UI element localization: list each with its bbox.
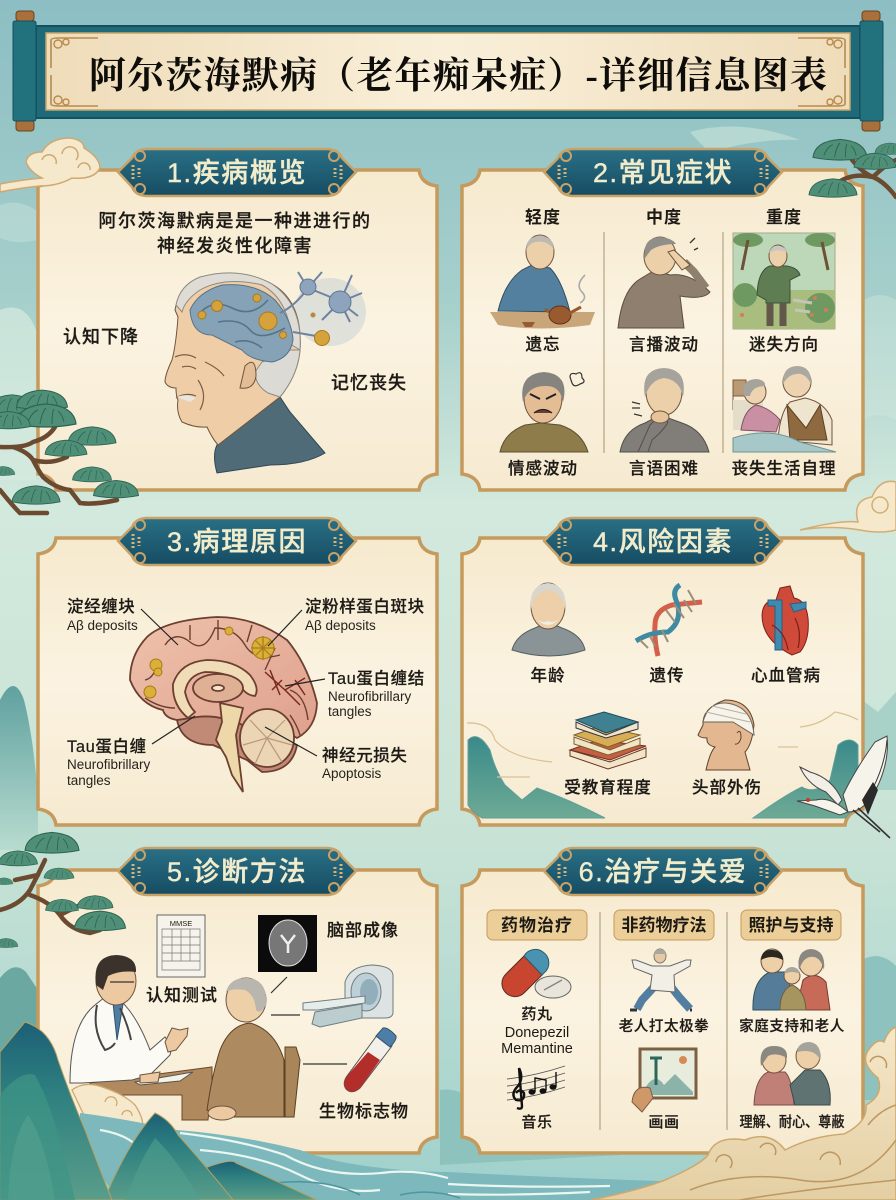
symptom: language fluctuation — [618, 237, 710, 354]
risk: genetics — [636, 585, 702, 685]
label: neuron loss — [322, 746, 408, 781]
banner — [544, 149, 782, 196]
panel 1: overview — [38, 149, 437, 490]
banner: 2.常见症状 — [593, 158, 733, 188]
risk: cardiovascular: 心血管病 — [751, 666, 821, 685]
label: plaque — [67, 596, 138, 633]
banner: 5.诊断方法 — [167, 857, 307, 887]
tai chi figure — [630, 949, 692, 1010]
column: non-drug therapy: 老人打太极拳 — [619, 1018, 709, 1035]
column: non-drug therapy: 非药物疗法 — [622, 915, 706, 935]
column: non-drug therapy — [614, 910, 714, 1131]
risk: head injury — [692, 700, 762, 797]
banner — [118, 149, 356, 196]
risk: education: 受教育程度 — [564, 778, 652, 797]
severity headers — [525, 208, 802, 227]
label: cognitive decline: 认知下降 — [63, 327, 139, 347]
banner: 3.病理原因 — [167, 527, 307, 557]
decoration: river — [80, 1113, 690, 1200]
panel 6: treatment — [462, 848, 863, 1153]
blood tube — [344, 1028, 396, 1092]
severity headers: 重度 — [766, 208, 802, 227]
symptom: forgetfulness — [490, 235, 595, 354]
column: medication: 药物治疗 — [501, 915, 573, 935]
symptom: language fluctuation: 言播波动 — [629, 335, 699, 354]
banner: 1.疾病概览 — [167, 158, 307, 188]
symptom: mood swings — [500, 372, 588, 478]
decoration: cloud right middle — [800, 481, 896, 532]
elderly man with brain — [165, 272, 366, 473]
pointer lines — [141, 609, 325, 756]
symptom: disorientation — [733, 233, 835, 354]
label: tau tangle: tangles — [328, 704, 372, 719]
column: medication: 药丸 — [521, 1006, 553, 1023]
risk: head injury: 头部外伤 — [692, 778, 762, 797]
label: amyloid plaque: Aβ deposits — [305, 618, 376, 633]
label: tau: Tau蛋白缠 — [67, 736, 147, 756]
label: cognitive test: 认知测试 — [146, 986, 218, 1005]
severity headers: 中度 — [646, 208, 682, 227]
decoration: clouds bottom right — [591, 1027, 896, 1200]
left roller — [13, 11, 36, 131]
painting — [632, 1049, 696, 1112]
mmse form: MMSE — [170, 919, 192, 928]
column: medication: Donepezil — [505, 1025, 569, 1041]
decoration: cloud top left — [0, 138, 100, 192]
panel 3: pathology — [38, 518, 437, 825]
label: tau tangle — [328, 668, 425, 719]
label: neuron loss: 神经元损失 — [322, 746, 408, 765]
patient — [207, 978, 300, 1120]
label: patience and respect: 理解、耐心、尊蔽 — [740, 1114, 845, 1131]
symptom: mood swings: 情感波动 — [508, 459, 578, 478]
decoration: pine tree left lower — [0, 832, 126, 948]
background mist — [0, 127, 896, 480]
intro text — [98, 211, 372, 256]
label: plaque: Aβ deposits — [67, 618, 138, 633]
severity headers: 轻度 — [525, 208, 561, 227]
risk: age: 年龄 — [530, 666, 566, 685]
landscape in panel — [467, 712, 858, 818]
banner — [544, 518, 782, 565]
symptom: disorientation: 迷失方向 — [749, 334, 819, 354]
right roller — [860, 11, 883, 131]
table — [90, 1067, 212, 1120]
risk: cardiovascular — [751, 586, 821, 685]
music notes — [507, 1066, 565, 1109]
symptom: forgetfulness: 遗忘 — [526, 334, 560, 354]
label: brain imaging: 脑部成像 — [327, 921, 399, 940]
symptom: loss of self-care — [732, 366, 836, 478]
decoration: pine tree top right — [809, 139, 896, 197]
symptom: loss of self-care: 丧失生活自理 — [732, 459, 836, 478]
mri scan — [258, 915, 317, 972]
background distant hill — [440, 1090, 620, 1165]
label: tau tangle: Tau蛋白缠结 — [328, 668, 425, 688]
intro text: 神经发炎性化障害 — [157, 236, 313, 256]
label: tau: Neurofibrillary — [67, 757, 151, 772]
label: memory loss: 记忆丧失 — [331, 373, 407, 393]
risk: genetics: 遗传 — [650, 666, 684, 685]
banner: 4.风险因素 — [593, 527, 733, 557]
symptom: speech difficulty — [620, 368, 709, 478]
title scroll — [13, 11, 883, 131]
decoration: cloud lower left — [72, 1084, 143, 1130]
title text: 阿尔茨海默病（老年痴呆症）-详细信息图表 — [89, 55, 827, 97]
intro text: 阿尔茨海默病是是一种进进行的 — [98, 211, 372, 231]
label: amyloid plaque: 淀粉样蛋白斑块 — [305, 597, 425, 616]
column: care and support — [739, 910, 845, 1105]
risk: education — [564, 712, 652, 797]
background distant mountains right — [862, 692, 896, 790]
family group — [753, 949, 830, 1010]
label: tau tangle: Neurofibrillary — [328, 689, 412, 704]
symptom: speech difficulty: 言语困难 — [629, 459, 699, 478]
background distant mountains lower left — [0, 967, 38, 1080]
column: non-drug therapy: 画画 — [648, 1114, 680, 1131]
decoration: bottom mountains — [0, 1022, 317, 1200]
column: medication: 音乐 — [521, 1114, 553, 1131]
label: neuron loss: Apoptosis — [322, 766, 382, 781]
banner — [118, 848, 356, 895]
column: medication: Memantine — [501, 1041, 573, 1057]
panel 5: diagnosis — [38, 848, 437, 1153]
column: care and support: 家庭支持和老人 — [739, 1017, 845, 1035]
label: biomarkers: 生物标志物 — [319, 1102, 409, 1121]
label: tau — [67, 736, 151, 788]
couple group — [754, 1042, 830, 1105]
label: tau: tangles — [67, 773, 111, 788]
panel 2: symptoms — [462, 149, 863, 490]
banner: 6.治疗与关爱 — [579, 857, 747, 887]
brain diagram — [130, 617, 317, 792]
risk: age — [512, 583, 585, 685]
pointer lines — [271, 977, 347, 1064]
decoration: pine tree left upper — [0, 390, 138, 513]
panel 4: risk factors — [462, 518, 863, 825]
mmse form — [157, 915, 205, 977]
capsule — [502, 949, 571, 998]
background distant mountains lower right — [862, 956, 896, 1100]
decoration: crane — [797, 736, 890, 838]
banner — [544, 848, 782, 895]
doctor — [70, 955, 188, 1083]
column: medication — [487, 910, 587, 1131]
background distant mountains left — [0, 686, 38, 850]
banner — [118, 518, 356, 565]
label: plaque: 淀经缠块 — [67, 596, 135, 616]
mri machine — [303, 965, 393, 1027]
label: amyloid plaque — [305, 597, 425, 633]
column: care and support: 照护与支持 — [748, 915, 834, 935]
